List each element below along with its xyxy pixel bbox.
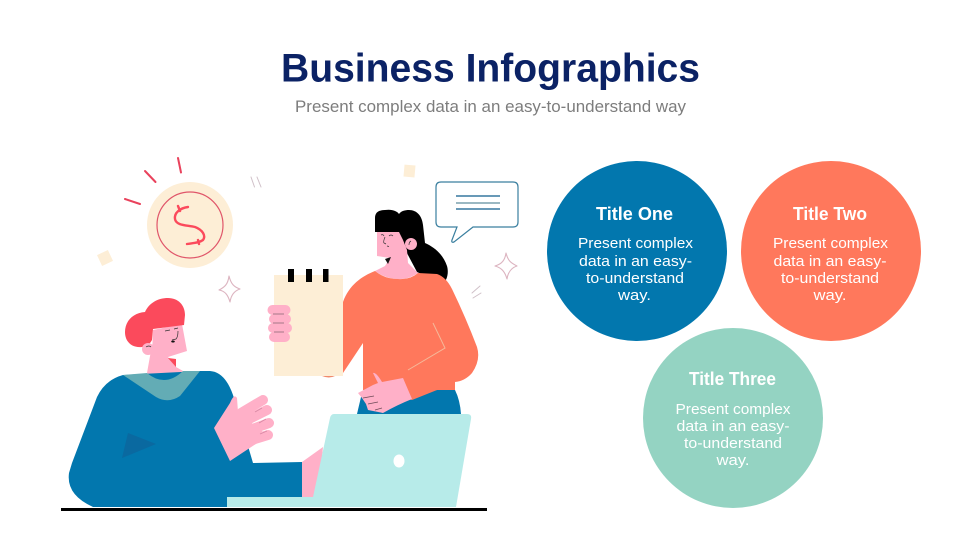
woman face and neck: [375, 232, 418, 279]
text block: three: way.: [715, 452, 750, 469]
circle: title three: [643, 328, 823, 508]
woman sweater: [343, 271, 478, 400]
man ear: [142, 343, 154, 355]
circle: title one: [547, 161, 727, 341]
text block: three: Present complex: [676, 401, 791, 418]
notepad rings: [288, 269, 328, 282]
circle: title two: Title Two: [793, 204, 867, 224]
woman right hand: [358, 373, 412, 413]
text block: three: [676, 401, 791, 469]
sparkle stars: [219, 253, 517, 302]
text block: one: [578, 235, 694, 304]
text block: one: data in an easy-: [579, 253, 692, 270]
text block: one: to-understand: [586, 270, 684, 287]
text block: three: data in an easy-: [676, 418, 790, 435]
illustration: business people: [61, 158, 518, 511]
circle: title three: Title Three: [689, 369, 776, 389]
subtitle: Present complex data in an easy-to-understand way: [295, 98, 687, 116]
man hair: [125, 298, 185, 347]
decorative diamonds: [97, 165, 416, 266]
notepad: [274, 275, 343, 376]
text block: one: way.: [617, 287, 651, 304]
sweater triangle: [122, 433, 156, 458]
man: [69, 298, 323, 507]
text block: two: [773, 235, 889, 304]
circle: title two: [741, 161, 921, 341]
text block: three: to-understand: [684, 435, 782, 452]
woman: [268, 210, 478, 414]
woman ear: [405, 238, 417, 250]
text block: two: data in an easy-: [774, 253, 886, 270]
speech bubble: [436, 182, 518, 242]
laptop: [227, 414, 471, 507]
man forearm skin: [302, 447, 323, 497]
title: Business Infographics: [281, 46, 700, 90]
text block: two: Present complex: [773, 235, 889, 252]
woman jeans: [357, 390, 461, 414]
sweater crease: [408, 323, 445, 370]
laptop logo: [394, 454, 404, 468]
man facial features: [146, 328, 178, 347]
man collar: [123, 371, 200, 400]
man neck: [147, 340, 183, 380]
woman left hand: [268, 305, 292, 342]
man hand: [214, 396, 269, 461]
woman fingers peeking: [322, 376, 335, 378]
sparkle lines: [251, 177, 481, 298]
woman hair: [375, 210, 448, 284]
icon: dollar coin: [147, 182, 233, 268]
man face: [152, 324, 187, 367]
woman facial features: [381, 235, 411, 246]
circle: title one: Title One: [596, 204, 673, 224]
ground line: [61, 508, 487, 511]
text block: two: to-understand: [781, 270, 879, 287]
man sweater: [69, 371, 302, 507]
coin rays: [125, 158, 181, 204]
text block: two: way.: [812, 287, 846, 304]
text block: one: Present complex: [578, 235, 694, 252]
